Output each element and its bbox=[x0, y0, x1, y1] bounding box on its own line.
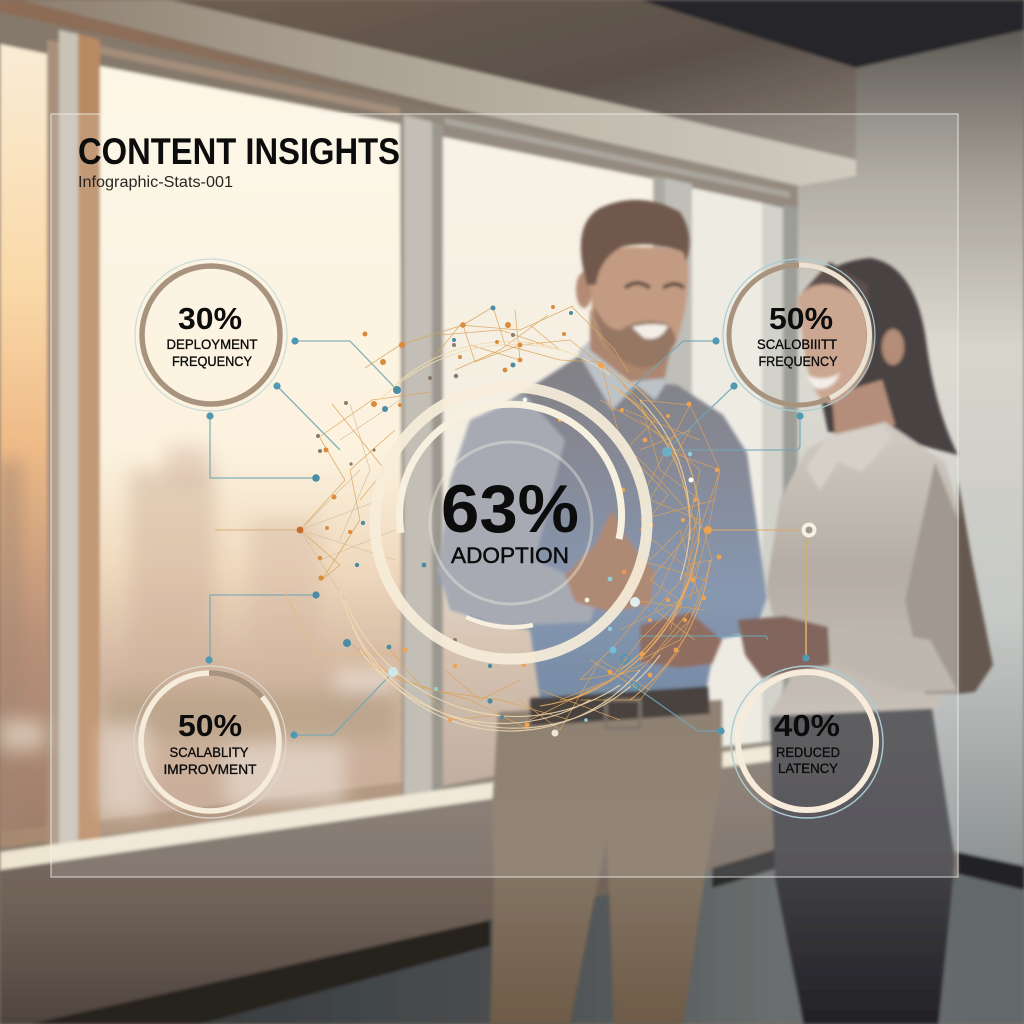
woman neck bbox=[832, 380, 895, 446]
progress arc bbox=[400, 404, 622, 539]
man face bbox=[590, 247, 688, 368]
man belt bbox=[530, 686, 710, 726]
woman sleeve inside panel bbox=[905, 462, 958, 694]
man ear bbox=[576, 272, 592, 308]
woman ear bbox=[882, 329, 904, 365]
window frame bbox=[0, 12, 798, 870]
stat ring: reduced latency bbox=[731, 666, 883, 818]
mullions bbox=[47, 30, 798, 855]
man trousers bbox=[490, 700, 722, 1024]
central ring gauge bbox=[375, 387, 647, 659]
floor bbox=[30, 852, 1024, 1024]
man hair bbox=[581, 200, 689, 285]
man neck bbox=[590, 310, 680, 382]
title: CONTENT INSIGHTS bbox=[78, 131, 400, 172]
man collar bbox=[578, 340, 668, 410]
lower wall bbox=[0, 757, 800, 1024]
central stat: ADOPTION bbox=[451, 543, 569, 568]
man beard bbox=[594, 305, 676, 368]
stat ring: scalability improvement: SCALABLITY bbox=[170, 744, 249, 760]
node: junction ring bbox=[804, 524, 814, 536]
window panes bbox=[0, 44, 783, 842]
stat ring: reduced latency: LATENCY bbox=[778, 760, 839, 776]
network sphere lines bbox=[300, 306, 720, 730]
stat ring: scalability frequency: FREQUENCY bbox=[758, 353, 838, 369]
window sill bbox=[0, 742, 800, 870]
man torso and arms bbox=[438, 352, 767, 700]
woman collar bbox=[806, 424, 892, 490]
woman blouse bbox=[766, 422, 993, 716]
woman smile bbox=[806, 373, 840, 389]
stat ring: deployment frequency: 30% bbox=[178, 301, 242, 336]
network orbit arcs bbox=[340, 341, 710, 731]
man hands bbox=[565, 510, 655, 612]
woman forearm and cuff bbox=[828, 627, 957, 692]
stat ring: scalability frequency: 50% bbox=[769, 301, 833, 336]
stat ring: reduced latency: 40% bbox=[774, 708, 840, 743]
woman face bbox=[797, 281, 872, 404]
stat ring: deployment frequency: DEPLOYMENT bbox=[166, 336, 258, 352]
stat ring: deployment frequency bbox=[135, 259, 287, 411]
woman hand bbox=[738, 616, 830, 678]
lower short arc bbox=[466, 617, 533, 627]
glass panel outline bbox=[51, 114, 958, 877]
stat ring: scalability improvement: 50% bbox=[178, 708, 242, 743]
man forearm bbox=[438, 395, 600, 626]
man eyes bbox=[625, 283, 684, 288]
connector lines bbox=[210, 341, 806, 735]
stat ring: reduced latency: REDUCED bbox=[776, 744, 840, 760]
stat ring: scalability frequency: SCALOBIIITT bbox=[757, 336, 837, 352]
city skyline through window bbox=[0, 445, 395, 840]
stat ring: scalability improvement bbox=[134, 666, 286, 818]
outer ring bbox=[375, 387, 647, 659]
woman hairline bbox=[797, 262, 868, 304]
endpoint nodes bbox=[205, 337, 814, 739]
stat ring: scalability frequency bbox=[723, 259, 875, 411]
subtitle: Infographic-Stats-001 bbox=[78, 174, 233, 191]
faint inner ring bbox=[430, 442, 592, 604]
window bottom strips bbox=[100, 782, 402, 836]
stat ring: scalability improvement: IMPROVMENT bbox=[164, 761, 257, 777]
person: woman bbox=[738, 258, 993, 1024]
person: man bbox=[438, 200, 767, 1024]
upper wall and soffit bbox=[0, 0, 1024, 190]
man smile bbox=[632, 324, 668, 339]
stat ring: deployment frequency: FREQUENCY bbox=[172, 353, 253, 369]
right wall bbox=[798, 30, 1024, 870]
woman trousers bbox=[770, 708, 955, 1024]
woman hair bbox=[800, 258, 958, 455]
central stat: 63% bbox=[441, 471, 579, 547]
network sphere nodes bbox=[297, 305, 722, 736]
woman sleeve outside panel bbox=[958, 480, 993, 694]
frame strip highlights bbox=[100, 46, 400, 116]
